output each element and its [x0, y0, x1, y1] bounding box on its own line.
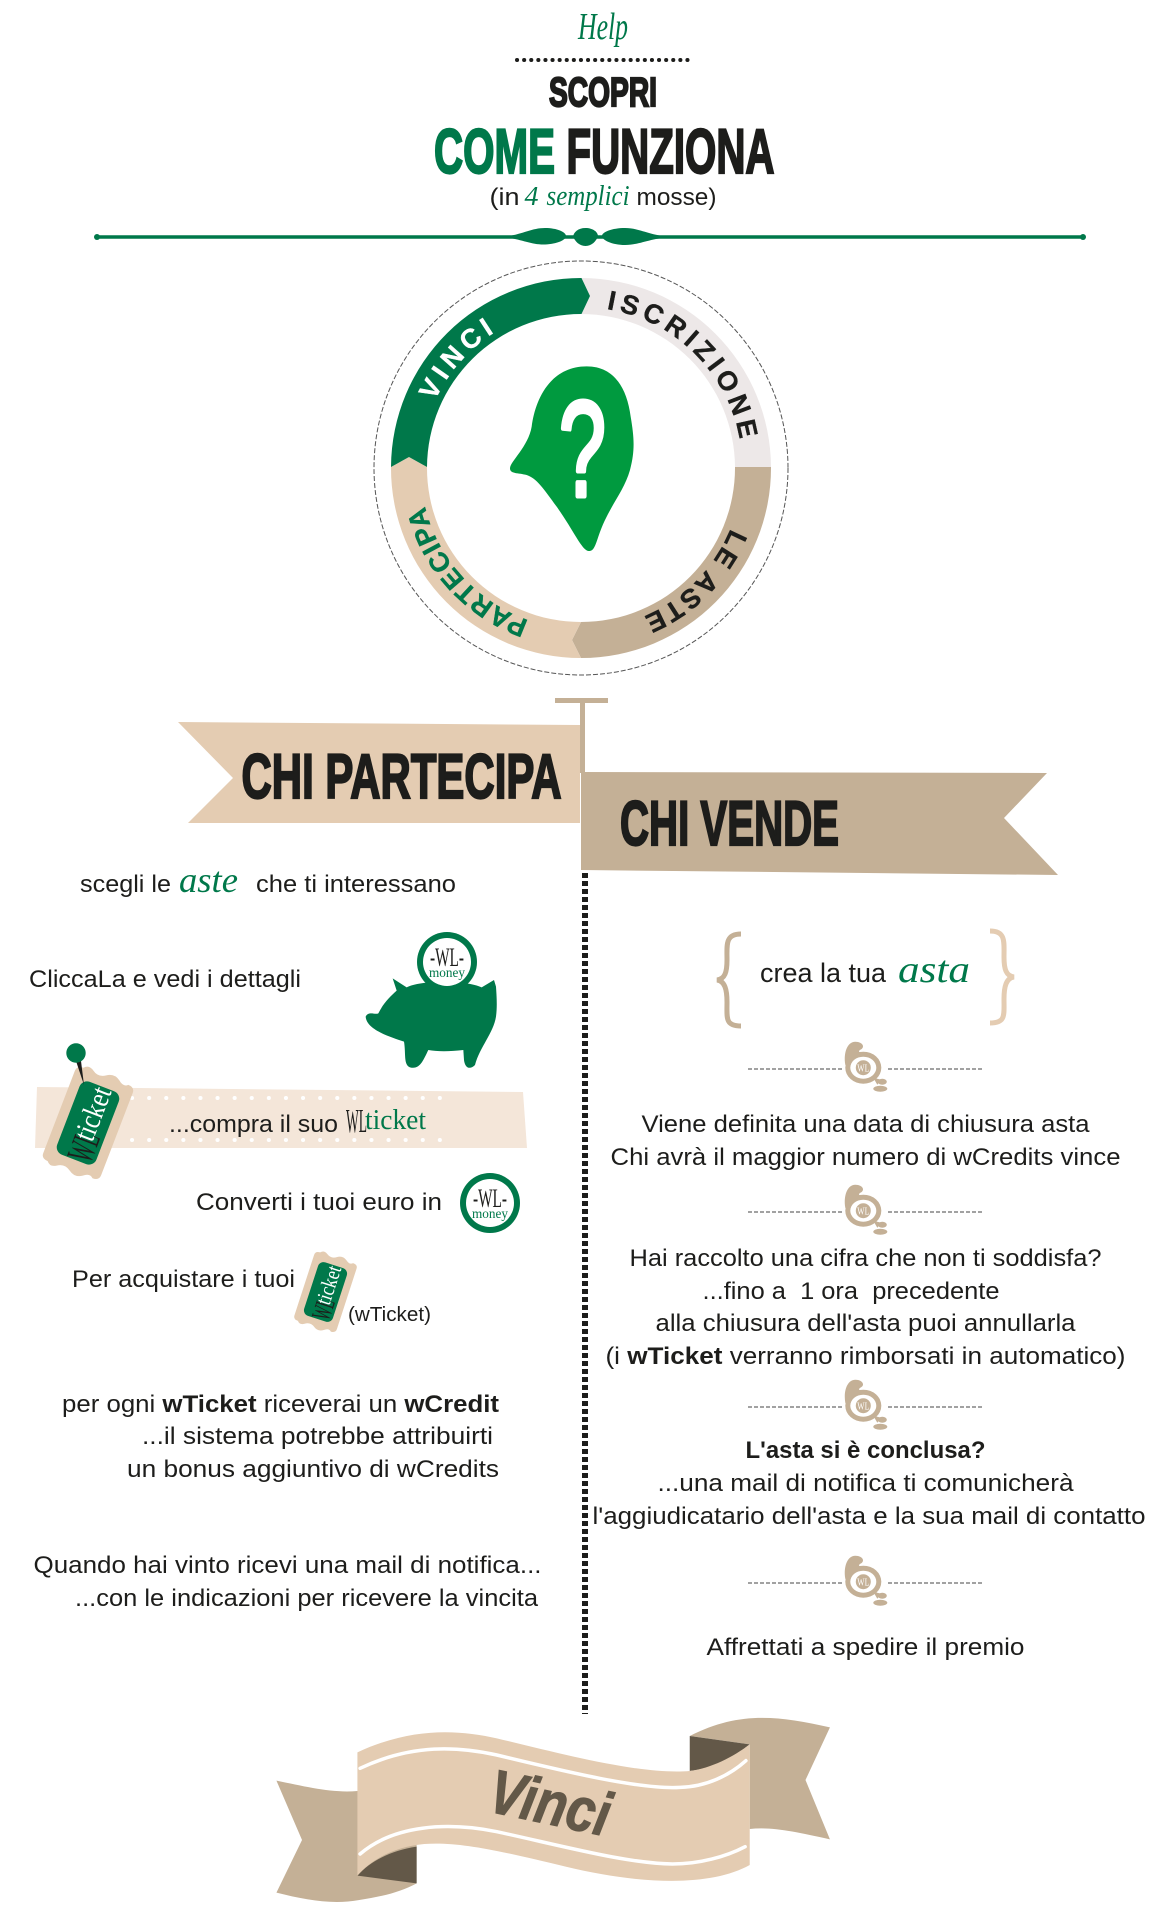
icon: piggy bank with coin: money: [429, 966, 465, 981]
title: COME FUNZIONA: FUNZIONA: [566, 117, 774, 187]
banner: chi vende: [581, 772, 1058, 875]
step: converti: Converti i tuoi euro in: [196, 1189, 442, 1216]
callout: crea la tua asta: asta: [898, 949, 970, 991]
divider 4: WL: [857, 1577, 869, 1589]
highlight band: compra il suo wticket: WL: [346, 1103, 367, 1140]
label: iscrizione: ISCRIZIONE: [608, 290, 758, 438]
icon: small ticket: ticket: [311, 1263, 346, 1308]
text block: vincita: [34, 1552, 542, 1612]
divider 3: [748, 1380, 983, 1430]
title: COME FUNZIONA: [434, 117, 774, 187]
highlight band: compra il suo wticket: ticket: [365, 1104, 426, 1136]
text block: annullamento: [606, 1245, 1126, 1370]
script label: Help: Help: [577, 6, 628, 48]
highlight band: compra il suo wticket: [35, 1087, 527, 1148]
subtitle: [490, 180, 716, 212]
icon: piggy bank with coin: [366, 932, 497, 1068]
text block: annullamento: alla chiusura dell'asta puoi annullarla: [656, 1310, 1076, 1337]
step: scegli le aste: che ti interessano: [256, 871, 456, 898]
icon: pinned ticket: WL: [59, 1126, 109, 1168]
text block: asta conclusa: ...una mail di notifica ti comunicherà: [658, 1470, 1074, 1497]
icon: question pin: [510, 366, 634, 551]
text block: vincita: Quando hai vinto ricevi una mail di notifica...: [34, 1552, 542, 1579]
title: SCOPRI: SCOPRI: [549, 69, 657, 115]
banner: chi vende: CHI VENDE: [620, 789, 839, 859]
text block: asta conclusa: l'aggiudicatario dell'asta e la sua mail di contatto: [592, 1503, 1146, 1530]
icon: question pin: ?: [559, 373, 606, 525]
icon: money coin: money: [472, 1207, 508, 1222]
subtitle: 4: [524, 181, 538, 211]
icon: piggy bank with coin: -WL-: [430, 943, 464, 972]
text block: annullamento: (i wTicket verranno rimborsati in automatico): [606, 1343, 1126, 1370]
icon: money coin: -WL-: [473, 1184, 507, 1213]
ribbon: vinci: Vinci: [483, 1757, 618, 1850]
divider 2: WL: [857, 1206, 869, 1218]
note: wticket: (wTicket): [348, 1304, 431, 1326]
segment: partecipa: [391, 457, 581, 658]
ornamental divider: [94, 228, 1086, 246]
text block: data di chiusura: [610, 1111, 1120, 1171]
icon: small ticket: [292, 1248, 359, 1336]
label: le aste: LE ASTE: [644, 530, 748, 633]
callout: crea la tua asta: [717, 931, 1014, 1026]
label: partecipa: PARTECIPA: [408, 506, 528, 638]
header: [434, 6, 774, 212]
text block: asta conclusa: L'asta si è conclusa?: [746, 1437, 986, 1464]
step: scegli le aste: [80, 860, 456, 900]
divider 1: WL: [857, 1063, 869, 1075]
text block: wcredit: per ogni wTicket riceverai un wCredit: [62, 1391, 499, 1418]
signpost pole: [555, 698, 608, 773]
divider 4: [748, 1556, 983, 1606]
circular diagram: [374, 260, 788, 676]
text block: annullamento: Hai raccolto una cifra che non ti soddisfa?: [630, 1245, 1102, 1272]
banner: chi partecipa: CHI PARTECIPA: [242, 742, 562, 812]
text block: wcredit: [62, 1391, 499, 1483]
divider 2: [748, 1185, 983, 1235]
text block: data di chiusura: Chi avrà il maggior numero di wCredits vince: [610, 1144, 1120, 1171]
text block: wcredit: un bonus aggiuntivo di wCredits: [127, 1456, 499, 1483]
text block: asta conclusa: [592, 1437, 1146, 1530]
divider 3: WL: [857, 1401, 869, 1413]
text block: vincita: ...con le indicazioni per ricevere la vincita: [75, 1585, 538, 1612]
subtitle: (in: [490, 184, 520, 211]
banner: chi partecipa: [178, 722, 580, 823]
subtitle: semplici: [546, 180, 630, 212]
text block: data di chiusura: Viene definita una data di chiusura asta: [642, 1111, 1090, 1138]
callout: crea la tua asta: crea la tua: [760, 958, 887, 988]
step: scegli le aste: aste: [179, 860, 238, 900]
step: scegli le aste: scegli le: [80, 871, 171, 898]
icon: pinned ticket: ticket: [68, 1082, 119, 1145]
subtitle: mosse): [636, 184, 716, 211]
segment: le aste: [572, 467, 771, 658]
text: affrettati: Affrettati a spedire il premio: [706, 1634, 1024, 1661]
text block: wcredit: ...il sistema potrebbe attribuirti: [142, 1423, 493, 1450]
ribbon: vinci: [276, 1718, 830, 1902]
label: vinci: VINCI: [418, 318, 493, 396]
highlight band: compra il suo wticket: ...compra il suo: [169, 1111, 338, 1138]
step: cliccala: CliccaLa e vedi i dettagli: [29, 966, 301, 993]
text block: annullamento: ...fino a 1 ora precedente: [702, 1278, 1000, 1305]
icon: small ticket: WL: [306, 1295, 341, 1324]
title: COME FUNZIONA: COME: [434, 117, 555, 187]
divider 1: [748, 1042, 983, 1092]
icon: money coin: [460, 1173, 520, 1233]
step: per acquistare: Per acquistare i tuoi: [72, 1266, 295, 1293]
icon: pinned ticket: [40, 1043, 136, 1184]
segment: vinci: [391, 278, 590, 467]
segment: iscrizione: [582, 278, 771, 467]
